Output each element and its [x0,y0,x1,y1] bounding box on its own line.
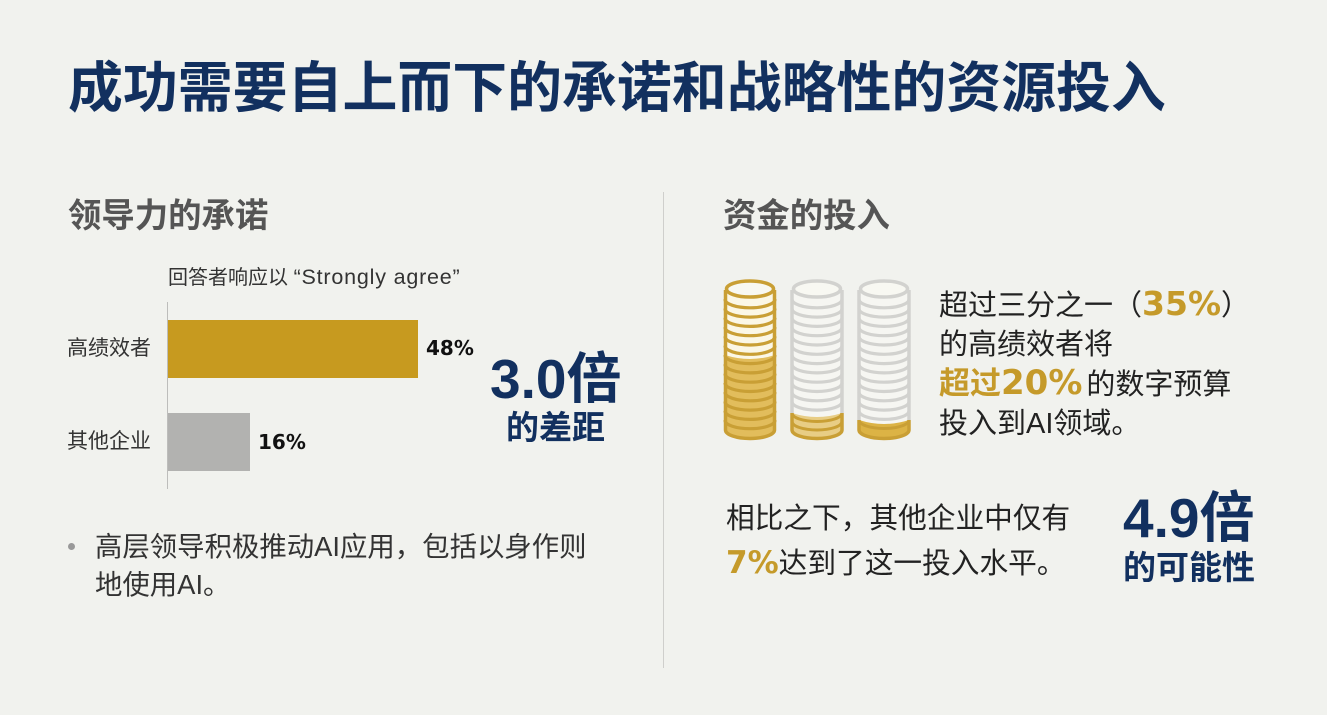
value: 16%: 16% [258,430,306,454]
coin stack 2 [792,281,842,438]
bar: other companies [168,413,250,471]
text: 35% of high performers: 的高绩效者将 [939,328,1113,360]
text: others 7%: 相比之下，其他企业中仅有 [726,503,1070,535]
label: high performers: 高绩效者 [67,337,151,360]
coin stack 3 [859,281,909,438]
chart subtitle: 回答者响应以 “Strongly agree” [168,265,461,289]
text: 35% of high performers: 投入到AI领域。 [939,408,1140,440]
text: 35% of high performers [939,284,1250,440]
panel divider [663,192,664,668]
panel: leadership commitment [67,198,621,600]
text: 35% of high performers: 超过三分之一（35%） [939,284,1250,323]
icon: coin stacks [723,279,911,440]
heading: funding: 资金的投入 [723,198,890,235]
bullet copy [95,531,587,600]
coin stack 1 [725,281,775,438]
bar: high performers [168,320,418,378]
callout caption: 的可能性 [1123,549,1255,586]
panel: funding [723,198,1255,586]
bullet text [68,531,587,600]
axis line [167,302,168,489]
callout: 4.9x likelihood [1123,487,1255,586]
callout: 3.0x gap [490,348,621,446]
label: other companies: 其他企业 [67,430,151,453]
bullet copy: 高层领导积极推动AI应用，包括以身作则 [95,531,587,562]
bullet copy: 地使用AI。 [95,569,230,600]
callout value: 4.9倍 [1123,487,1254,549]
callout caption: 的差距 [506,409,605,446]
bar chart [67,302,474,489]
title: 成功需要自上而下的承诺和战略性的资源投入 [68,57,1166,119]
callout value: 3.0倍 [490,348,621,410]
heading: leadership: 领导力的承诺 [68,198,268,235]
bullet dot [68,543,75,550]
text: others 7%: 7%达到了这一投入水平。 [726,545,1066,581]
text: 35% of high performers: 超过20%的数字预算 [939,363,1231,403]
text: others 7% [726,503,1070,581]
value: 48%: 48% [426,336,474,360]
